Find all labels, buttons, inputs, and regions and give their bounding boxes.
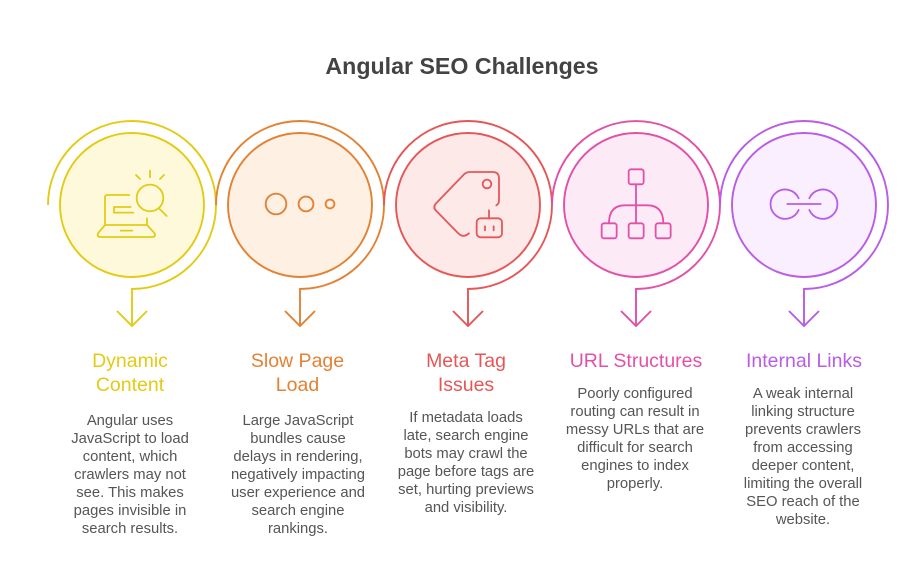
heading: Internal Links: Internal Links	[746, 350, 862, 372]
icon: laptop with magnifier	[98, 171, 167, 237]
step 4: URL Structures	[552, 121, 720, 492]
circle: Slow Page Load	[228, 133, 372, 277]
text: Meta Tag Issues description: set, hurting previews	[398, 482, 534, 498]
text: Slow Page Load description: rankings.	[268, 521, 328, 537]
text: Dynamic Content description: see. This makes	[76, 485, 184, 501]
text: Internal Links description: website.	[775, 512, 830, 528]
text: URL Structures description: engines to index	[581, 458, 689, 474]
text: URL Structures description: routing can result in	[570, 404, 700, 420]
text: Slow Page Load description: delays in rendering,	[233, 449, 363, 465]
heading: Slow Page Load: Load	[276, 374, 319, 396]
icon: chain link	[771, 189, 837, 219]
arrow: Slow Page Load	[216, 121, 384, 326]
circle: Meta Tag Issues	[396, 133, 540, 277]
text: Internal Links description: prevents crawlers	[745, 422, 861, 438]
text: Slow Page Load description: search engine	[252, 503, 344, 519]
text: Meta Tag Issues description: page before tags are	[398, 464, 534, 480]
text: Dynamic Content description: content, which	[83, 449, 177, 465]
step 2: Slow Page Load	[216, 121, 384, 537]
text: Internal Links description: A weak internal	[753, 386, 853, 402]
text: Internal Links description: deeper content,	[752, 458, 854, 474]
text: URL Structures description: messy URLs that are	[566, 422, 704, 438]
text: URL Structures description: difficult for search	[577, 440, 693, 456]
text: URL Structures description: Poorly configured	[577, 386, 693, 402]
heading: URL Structures: URL Structures	[570, 350, 703, 372]
heading: Dynamic Content: Dynamic	[92, 350, 168, 372]
arrow: Dynamic Content	[48, 121, 216, 326]
arrow: Internal Links	[720, 121, 888, 326]
circle: URL Structures	[564, 133, 708, 277]
heading: Meta Tag Issues: Issues	[438, 374, 494, 396]
text: Slow Page Load description: Large JavaScript	[242, 413, 354, 429]
heading: Slow Page Load: Slow Page	[251, 350, 344, 372]
icon: three shrinking dots	[266, 194, 334, 214]
step 3: Meta Tag Issues	[384, 121, 552, 516]
arrow: Meta Tag Issues	[384, 121, 552, 326]
text: Meta Tag Issues description: If metadata loads	[409, 410, 523, 426]
heading: Meta Tag Issues: Meta Tag	[426, 350, 506, 372]
heading: Dynamic Content: Content	[96, 374, 165, 396]
text: Dynamic Content description: search results.	[82, 521, 178, 537]
circle: Internal Links	[732, 133, 876, 277]
arrow: URL Structures	[552, 121, 720, 326]
title: Angular SEO Challenges	[325, 53, 599, 79]
text: Internal Links description: limiting the overall	[744, 476, 862, 492]
text: Slow Page Load description: negatively impacting	[231, 467, 365, 483]
text: URL Structures description: properly.	[607, 476, 663, 492]
text: Slow Page Load description: user experience and	[231, 485, 365, 501]
text: Internal Links description: SEO reach of the	[746, 494, 860, 510]
text: Meta Tag Issues description: bots may crawl the	[404, 446, 528, 462]
step 5: Internal Links	[720, 121, 888, 528]
text: Dynamic Content description: pages invisible in	[74, 503, 186, 519]
text: Dynamic Content description: crawlers may not	[74, 467, 186, 483]
text: Slow Page Load description: bundles cause	[250, 431, 346, 447]
text: Dynamic Content description: Angular uses	[87, 413, 173, 429]
text: Meta Tag Issues description: late, search engine	[403, 428, 529, 444]
text: Internal Links description: linking structure	[751, 404, 855, 420]
text: Internal Links description: from accessing	[753, 440, 853, 456]
circle: Dynamic Content	[60, 133, 204, 277]
icon: tag with robot	[434, 172, 502, 237]
text: Meta Tag Issues description: and visibility.	[425, 500, 507, 516]
icon: site hierarchy	[602, 169, 671, 238]
step 1: Dynamic Content	[48, 121, 216, 537]
text: Dynamic Content description: JavaScript to load	[71, 431, 189, 447]
